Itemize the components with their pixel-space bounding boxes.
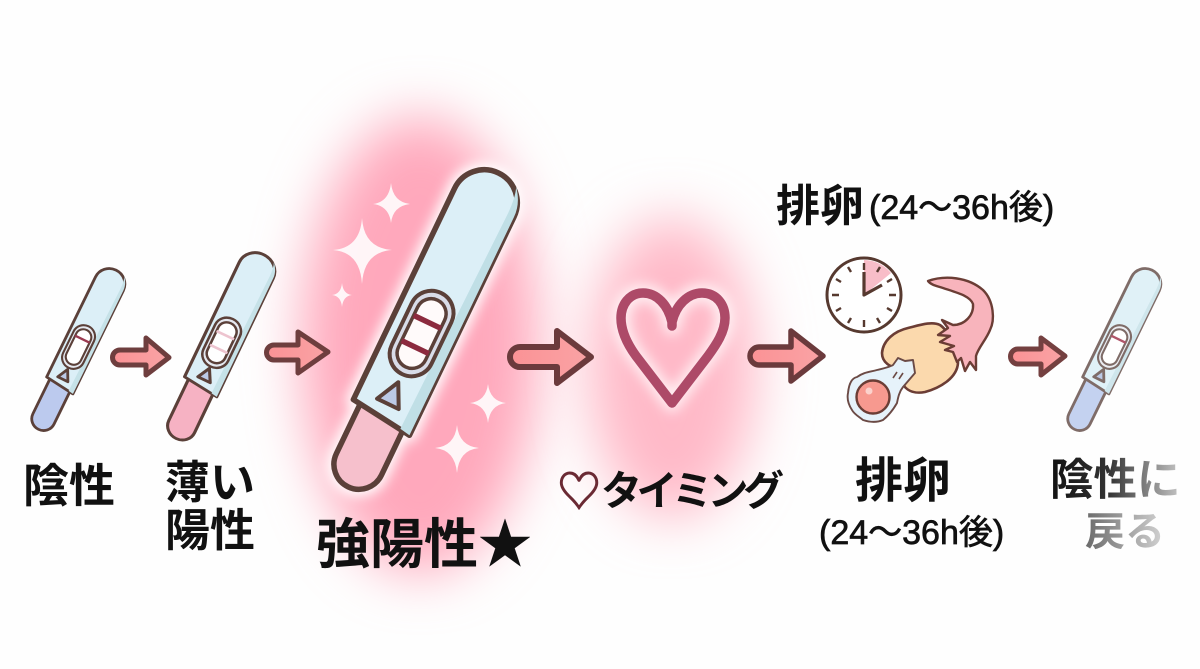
label: negative: 陰性 [23, 460, 115, 512]
sparkles around strong positive [332, 183, 506, 473]
heading: ovulation time: (24～36h後) [869, 189, 1054, 227]
test stick: back to negative [1060, 263, 1166, 436]
arrow 3 [510, 331, 591, 383]
heading: ovulation time: 排卵 [776, 182, 864, 231]
label: ovulation: (24～36h後) [819, 514, 1004, 552]
arrow 4 [750, 331, 823, 381]
label: faint positive: 陽性 [165, 505, 255, 556]
white glow behind strong stick [309, 149, 538, 510]
label: return to negative: 陰性に [1050, 457, 1180, 505]
test stick: faint positive [159, 247, 281, 447]
arrow 5 [1010, 338, 1065, 375]
label: timing: タイミング [601, 468, 784, 514]
label: return to negative: 戻る [1085, 510, 1165, 554]
illustration: ovary [882, 323, 958, 393]
heart [621, 293, 725, 403]
arrow 1 [112, 338, 169, 375]
label: timing: ♡ [557, 468, 601, 517]
label: return to negative [1050, 457, 1180, 554]
illustration: released egg [848, 358, 915, 422]
icon: clock [827, 258, 901, 332]
arrow 2 [267, 332, 328, 373]
heading: ovulation time [776, 182, 1054, 231]
background glow: strong positive [302, 117, 538, 573]
label: faint positive [165, 457, 255, 556]
label: strong positive: 強陽性★ [316, 515, 532, 575]
label: ovulation [819, 455, 1004, 552]
test stick: negative [24, 263, 130, 436]
background glow: timing [588, 218, 756, 518]
label: ovulation: 排卵 [855, 455, 951, 508]
label: faint positive: 薄い [165, 457, 255, 508]
test stick: strong positive [318, 159, 528, 501]
illustration: fallopian tube [928, 278, 993, 371]
